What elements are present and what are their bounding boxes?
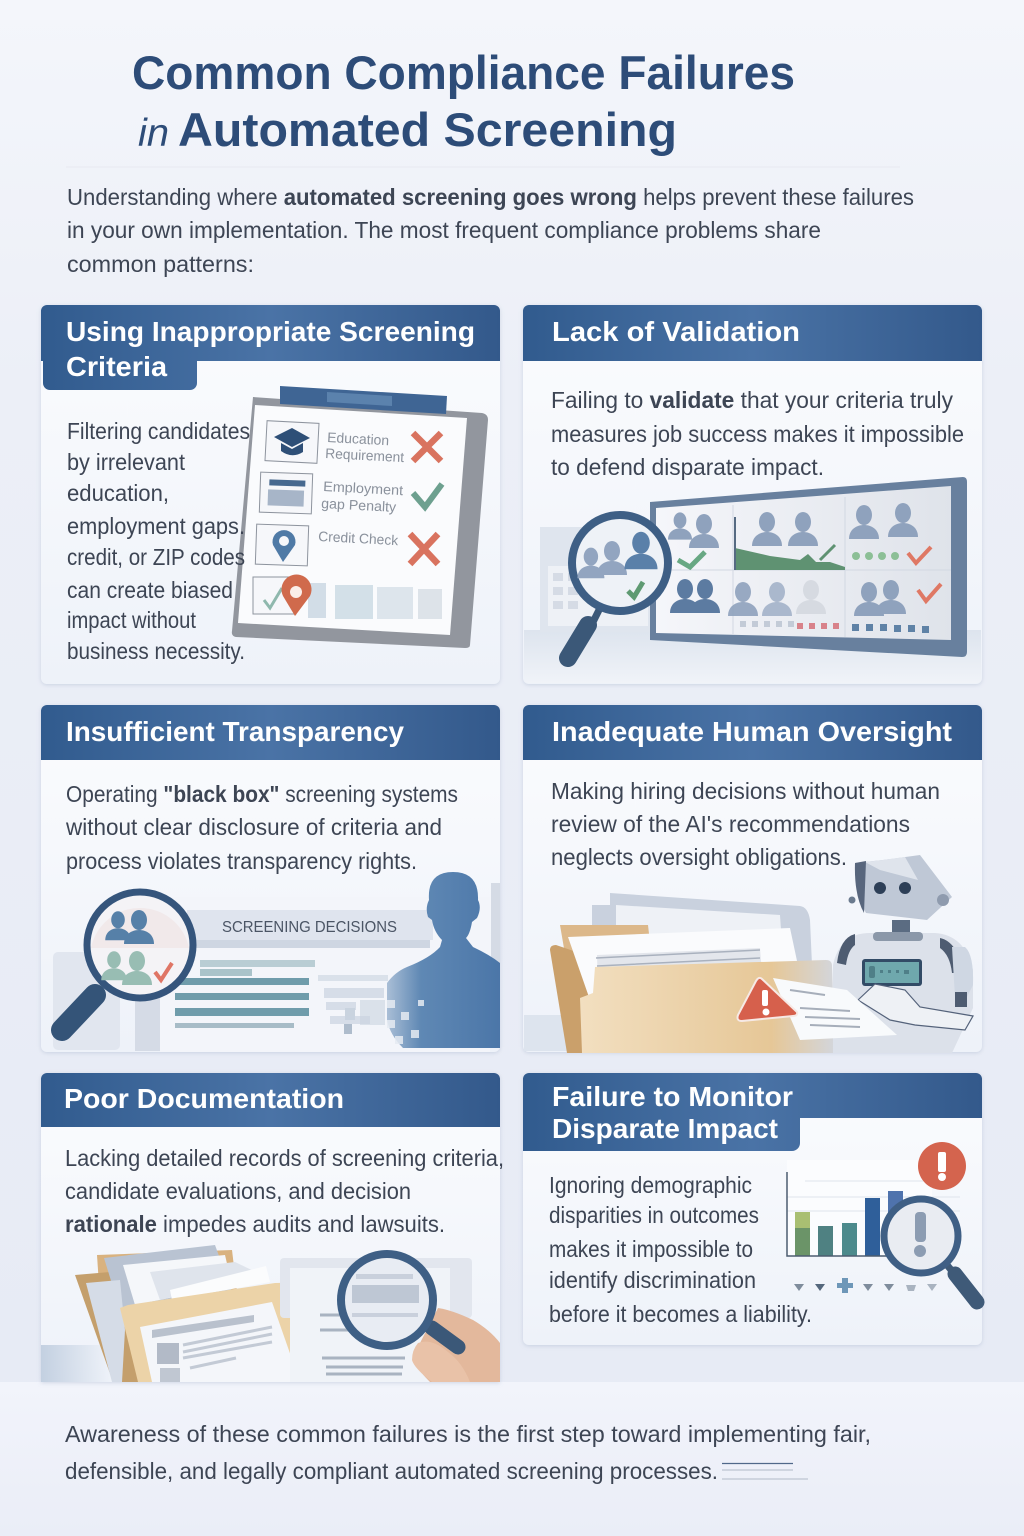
header: insufficient transparency <box>41 705 500 760</box>
illustration: clipboard checklist <box>232 386 488 648</box>
intro text <box>67 184 914 277</box>
body text: monitoring <box>549 1172 812 1327</box>
panel: poor documentation <box>41 1073 504 1382</box>
icon: folder with papers <box>550 893 835 1053</box>
icon: graduation cap <box>265 421 319 463</box>
body text: inappropriate criteria: business necessity. <box>67 638 245 664</box>
header: failure to monitor: Disparate Impact <box>552 1113 778 1144</box>
chart label: SCREENING DECISIONS <box>222 919 397 936</box>
body text: transparency: Operating "black box" screening systems <box>66 781 458 807</box>
panel: failure to monitor disparate impact <box>523 1073 982 1345</box>
panel: lack of validation <box>523 305 982 684</box>
icon: red cross 2 <box>410 534 438 564</box>
illustration: folders, magnifier and hand <box>75 1245 500 1382</box>
illustration: clipboard checklist: Employment <box>323 478 404 498</box>
body text: oversight: Making hiring decisions without human <box>551 778 940 804</box>
icon: location pin card <box>255 524 309 566</box>
body text: inappropriate criteria: credit, or ZIP codes <box>67 544 245 570</box>
title: in <box>138 112 169 155</box>
header: inadequate human oversight <box>523 705 982 760</box>
body text: monitoring: disparities in outcomes <box>549 1202 759 1228</box>
body text: inappropriate criteria: Filtering candidates <box>67 418 250 444</box>
robot arm and hand <box>858 984 973 1030</box>
robot head <box>848 855 952 920</box>
header: failure to monitor <box>523 1073 982 1151</box>
icon: robot <box>833 855 973 1053</box>
body text: inappropriate criteria: employment gaps. <box>67 513 245 539</box>
body text: documentation: Lacking detailed records of screening criteria, <box>65 1145 504 1171</box>
panel: insufficient transparency <box>41 705 500 1052</box>
icon: employment card <box>259 472 313 514</box>
title: Automated Screening <box>178 103 677 156</box>
legend icons <box>794 1278 937 1293</box>
body text: validation: measures job success makes it impossible <box>551 421 964 447</box>
bar chart with magnifier <box>787 1142 977 1302</box>
icon: magnifier <box>341 1254 458 1347</box>
icon: red cross 1 <box>413 433 441 461</box>
body text: documentation: candidate evaluations, and decision <box>65 1178 411 1204</box>
body text: oversight: review of the AI's recommendations <box>551 811 910 837</box>
body text: validation: to defend disparate impact. <box>551 454 824 480</box>
icon: hand <box>413 1308 500 1382</box>
body text: transparency: process violates transparency rights. <box>66 848 417 874</box>
header: using inappropriate screening criteria <box>41 305 500 390</box>
body text: monitoring: before it becomes a liability. <box>549 1301 812 1327</box>
panel: inadequate human oversight <box>523 705 982 1053</box>
intro text: in your own implementation. The most frequent compliance problems share <box>67 217 821 243</box>
header: poor documentation: Poor Documentation <box>64 1083 344 1114</box>
closing statement: Awareness of these common failures is the first step toward implementing fair, <box>65 1421 871 1447</box>
closing statement <box>65 1421 871 1484</box>
icon: document behind magnifier <box>280 1258 472 1382</box>
panel: using inappropriate screening criteria <box>41 305 500 684</box>
body text: documentation: rationale impedes audits and lawsuits. <box>65 1211 445 1237</box>
body text: validation <box>551 387 964 480</box>
header: inadequate human oversight: Inadequate Human Oversight <box>552 716 952 747</box>
icon: silhouette <box>387 872 500 1048</box>
body text: transparency: without clear disclosure of criteria and <box>65 814 442 840</box>
body text: monitoring: identify discrimination <box>549 1267 756 1293</box>
intro text: Understanding where automated screening goes wrong helps prevent these failures <box>67 184 914 210</box>
header: lack of validation: Lack of Validation <box>552 316 800 347</box>
icon: magnifier with exclamation <box>884 1199 977 1302</box>
icon: paper document <box>773 978 897 1040</box>
icon: red alert <box>918 1142 966 1190</box>
pixel mosaic <box>318 975 388 1034</box>
icon: stacked folders <box>75 1245 326 1382</box>
body text: inappropriate criteria <box>67 418 250 664</box>
magnifying glass <box>568 515 668 658</box>
illustration: monitor and magnifier <box>524 477 981 683</box>
illustration: clipboard checklist: Credit Check <box>318 528 400 548</box>
body text: oversight <box>551 778 940 870</box>
bars <box>795 1191 903 1256</box>
illustration: folders, warning and robot <box>524 855 973 1053</box>
illustration: clipboard checklist: gap Penalty <box>321 495 397 515</box>
icon: green check <box>413 484 442 507</box>
body text: transparency <box>65 781 458 874</box>
intro text: common patterns: <box>67 251 254 277</box>
body text: inappropriate criteria: impact without <box>67 607 197 633</box>
body text: validation: Failing to validate that your criteria truly <box>551 387 953 413</box>
header: insufficient transparency: Insufficient Transparency <box>66 716 404 747</box>
body text: oversight: neglects oversight obligations. <box>551 844 847 870</box>
body text: inappropriate criteria: by irrelevant <box>67 449 186 475</box>
icon: blurred row <box>253 574 442 619</box>
header: using inappropriate screening criteria: Criteria <box>66 351 167 382</box>
icon: thumb <box>412 1342 470 1382</box>
header: poor documentation <box>41 1073 500 1127</box>
illustration: clipboard checklist: Education <box>327 429 390 448</box>
header: failure to monitor: Failure to Monitor <box>552 1081 793 1112</box>
blurred data bars <box>175 960 315 1028</box>
header: using inappropriate screening criteria: Using Inappropriate Screening <box>66 316 475 347</box>
body text: inappropriate criteria: education, <box>67 480 169 506</box>
body text: monitoring: Ignoring demographic <box>549 1172 752 1198</box>
icon: magnifier <box>62 892 193 1030</box>
body text: monitoring: makes it impossible to <box>549 1236 753 1262</box>
closing statement: defensible, and legally compliant automated screening processes. <box>65 1458 718 1484</box>
title: Common Compliance Failures <box>132 46 795 99</box>
illustration: clipboard checklist: Requirement <box>325 445 405 465</box>
body text: inappropriate criteria: can create biased <box>67 577 233 603</box>
body text: documentation <box>65 1145 504 1237</box>
header: lack of validation <box>523 305 982 361</box>
monitor <box>650 477 967 657</box>
title <box>132 46 795 156</box>
illustration: screening decisions and silhouette <box>53 872 500 1052</box>
icon: warning triangle <box>738 978 797 1021</box>
